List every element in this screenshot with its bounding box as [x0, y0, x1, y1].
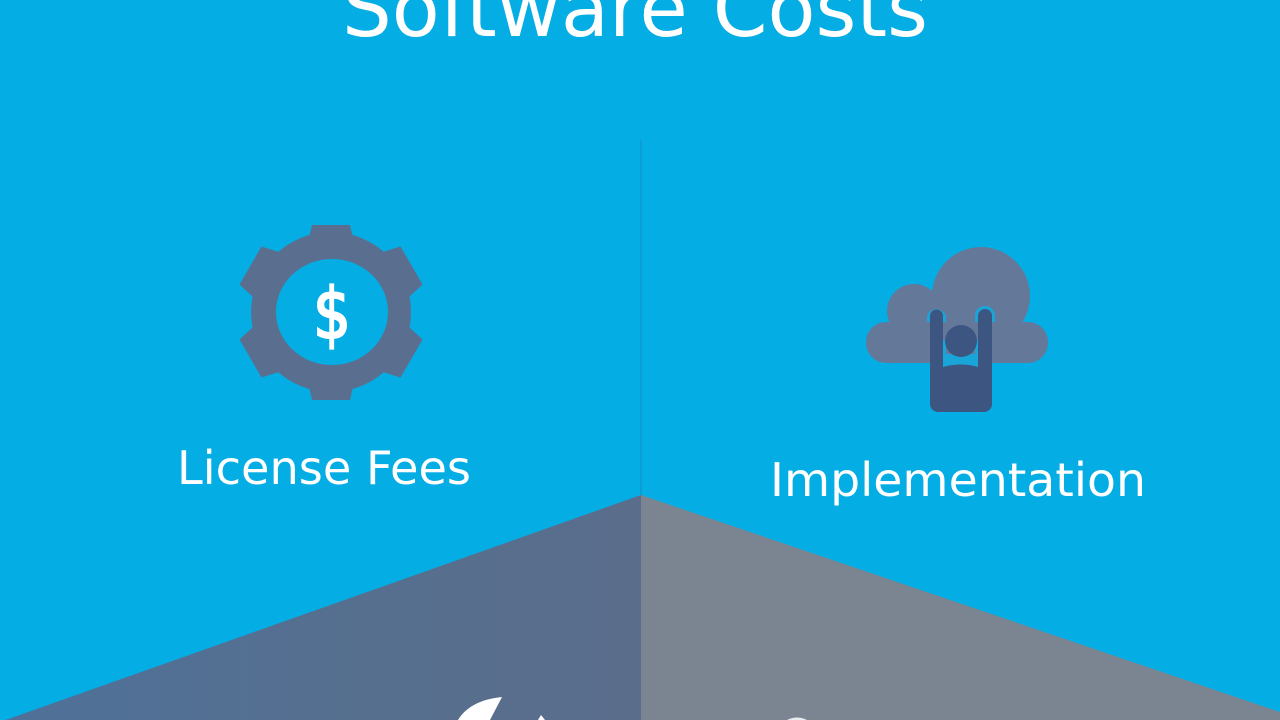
implementation label: Implementation	[770, 453, 1146, 507]
panel: license fees	[177, 225, 471, 495]
panel: lower right wedge	[641, 495, 1280, 720]
icon: gear with dollar sign: $	[313, 273, 351, 355]
license fees label: License Fees	[177, 441, 471, 495]
icon: cropped white shape	[787, 718, 807, 720]
icon: person lifting cloud	[866, 247, 1048, 412]
icon: gear with dollar sign	[236, 225, 426, 400]
icon: cropped white shape	[458, 697, 502, 720]
panel: implementation	[770, 247, 1146, 507]
panel: lower left wedge	[0, 495, 641, 720]
vertical divider	[640, 140, 642, 496]
